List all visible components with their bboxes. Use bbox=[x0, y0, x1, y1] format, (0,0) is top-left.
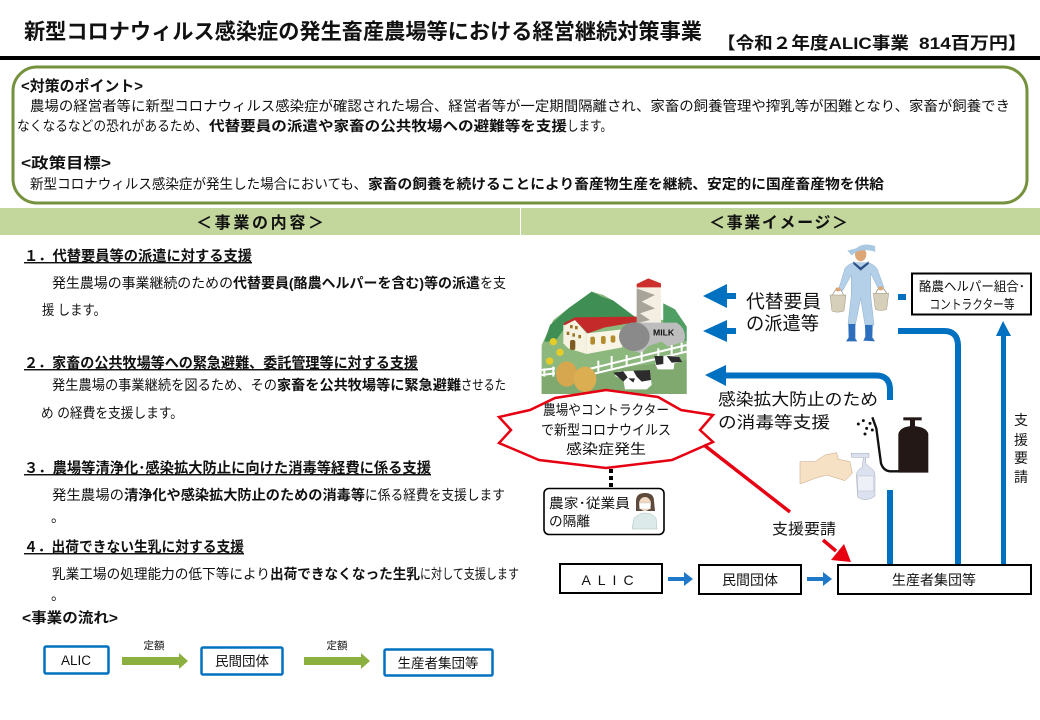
text block: item 2: 家畜を公共牧場等に緊急避難 bbox=[277, 377, 461, 393]
flow box: private organization: 民間団体 bbox=[215, 654, 269, 669]
panel: policy points: 農場の経営者等に新型コロナウィルス感染症が確認された場合、経営者等が一定期間隔離され、家畜の飼養管理や搾乳等が困難となり、家畜が飼養でき bbox=[30, 98, 1010, 114]
label: vertical support request: 請 bbox=[1014, 469, 1028, 485]
icon: farm illustration bbox=[542, 278, 687, 394]
flow chart bbox=[44, 639, 492, 676]
text block: item 4 bbox=[24, 538, 519, 603]
text block: item 4: 出荷できなくなった生乳 bbox=[270, 566, 420, 582]
icon: dairy farmer bbox=[830, 244, 889, 341]
text block: item 1: １．代替要員等の派遣に対する支援 bbox=[24, 247, 252, 265]
text block: item 1: 発生農場の事業継続のための bbox=[52, 275, 233, 291]
callout: outbreak burst bbox=[499, 390, 713, 468]
box: producer groups bbox=[838, 565, 1031, 594]
flow arrow: fixed amount 2 bbox=[304, 639, 370, 669]
text block: item 2: ２．家畜の公共牧場等への緊急避難、委託管理等に対する支援 bbox=[24, 354, 418, 372]
dotted connector bbox=[609, 469, 613, 488]
heading: business image: ＜事業イメージ＞ bbox=[709, 213, 848, 232]
box: private organization: 民間団体 bbox=[722, 572, 778, 588]
label: disinfection support bbox=[718, 390, 878, 432]
budget label: 814百万円】 bbox=[919, 34, 1027, 53]
icon: sprayer bbox=[857, 417, 928, 473]
label: dispatch of replacement staff: 代替要員 bbox=[746, 291, 821, 312]
panel: policy points: します。 bbox=[567, 118, 612, 134]
heading: business content: ＜事業の内容＞ bbox=[196, 213, 324, 232]
panel: policy points: 新型コロナウィルス感染症が発生した場合においても、 bbox=[30, 176, 367, 192]
arrow: ALIC to organization bbox=[668, 572, 693, 586]
panel: policy points bbox=[13, 67, 1027, 203]
arrow: line from producer groups to helper bbox=[898, 331, 958, 565]
panel: policy points: 代替要員の派遣や家畜の公共牧場への避難等を支援 bbox=[209, 118, 567, 134]
flow box: ALIC bbox=[44, 646, 108, 674]
flow box: producer groups bbox=[384, 650, 492, 676]
text block: item 1 bbox=[24, 247, 506, 318]
icon: masked person bbox=[632, 493, 657, 529]
label: disinfection support: の消毒等支援 bbox=[718, 413, 830, 432]
text block: item 2 bbox=[24, 354, 506, 421]
panel: policy points: <対策のポイント> bbox=[21, 77, 143, 95]
text block: item 2: 発生農場の事業継続を図るため、その bbox=[52, 377, 277, 393]
text block: item 4: 。 bbox=[51, 587, 65, 603]
text block: item 3: 清浄化や感染拡大防止のための消毒等 bbox=[124, 487, 365, 503]
text block: item 4: 乳業工場の処理能力の低下等により bbox=[52, 566, 270, 582]
arrow: line to farm via disinfection bbox=[705, 365, 890, 565]
label: vertical support request: 支 bbox=[1014, 412, 1028, 428]
label: vertical support request: 援 bbox=[1014, 432, 1028, 448]
arrow: replacement staff 1 bbox=[703, 284, 736, 308]
flow arrow: fixed amount 1 bbox=[122, 639, 188, 669]
text block: item 1: を支 bbox=[480, 275, 506, 291]
flow arrow: fixed amount 1: 定額 bbox=[144, 639, 165, 652]
callout: isolation: 農家･従業員 bbox=[549, 496, 630, 511]
budget label bbox=[717, 33, 1027, 53]
arrow: replacement staff 2 bbox=[703, 320, 736, 342]
box: ALIC: ALIC bbox=[581, 572, 641, 588]
flow box: producer groups: 生産者集団等 bbox=[398, 655, 478, 671]
label: vertical support request bbox=[1014, 412, 1028, 485]
callout: outbreak burst: で新型コロナウイルス bbox=[541, 422, 671, 438]
label: disinfection support: 感染拡大防止のため bbox=[718, 390, 878, 409]
label: vertical support request: 要 bbox=[1014, 450, 1028, 466]
text block: item 4: ４．出荷できない生乳に対する支援 bbox=[24, 538, 244, 556]
panel: policy points: なくなるなどの恐れがあるため、 bbox=[17, 118, 208, 134]
text block: item 2: させるた bbox=[461, 377, 506, 393]
box: ALIC bbox=[560, 564, 662, 593]
box: producer groups: 生産者集団等 bbox=[892, 572, 976, 588]
callout: outbreak burst: 農場やコントラクター bbox=[543, 402, 669, 418]
arrow: support request upward bbox=[996, 321, 1011, 565]
text block: item 1: 援 します。 bbox=[42, 302, 106, 318]
icon: farm illustration: MILK bbox=[653, 327, 675, 337]
label: dispatch of replacement staff bbox=[746, 291, 821, 334]
panel: policy points: 家畜の飼養を続けることにより畜産物生産を継続、安定的に国産畜産物を供給 bbox=[368, 176, 884, 192]
text block: item 3 bbox=[24, 459, 505, 525]
text block: item 1: 代替要員(酪農ヘルパーを含む)等の派遣 bbox=[233, 275, 480, 291]
icon: hand sanitizer bbox=[800, 453, 875, 500]
text block: item 3: 発生農場の bbox=[52, 487, 124, 503]
connector dash bbox=[898, 294, 906, 300]
title rule bbox=[0, 56, 1040, 60]
text block: item 3: 。 bbox=[51, 509, 65, 525]
flow box: ALIC: ALIC bbox=[61, 653, 91, 668]
text block: item 2: め の経費を支援します。 bbox=[41, 405, 183, 421]
label: support request: 支援要請 bbox=[772, 521, 836, 538]
flow arrow: fixed amount 2: 定額 bbox=[326, 639, 348, 652]
box: dairy helper union: 酪農ヘルパー組合･ bbox=[919, 279, 1025, 294]
arrow: organization to producers bbox=[807, 572, 832, 586]
text block: item 3: に係る経費を支援します bbox=[365, 487, 505, 503]
heading: business image bbox=[521, 208, 1040, 235]
heading: business flow: <事業の流れ> bbox=[22, 609, 118, 627]
label: dispatch of replacement staff: の派遣等 bbox=[746, 313, 819, 334]
text block: item 4: に対して支援します bbox=[420, 566, 519, 582]
title: 新型コロナウィルス感染症の発生畜産農場等における経営継続対策事業 bbox=[24, 19, 702, 44]
budget label: 【令和２年度ALIC事業 bbox=[717, 33, 909, 53]
callout: outbreak burst: 感染症発生 bbox=[566, 441, 646, 457]
heading: business content bbox=[0, 208, 520, 235]
panel: policy points: <政策目標> bbox=[21, 154, 111, 172]
text block: item 3: ３．農場等清浄化･感染拡大防止に向けた消毒等経費に係る支援 bbox=[24, 459, 431, 477]
callout: isolation bbox=[544, 488, 664, 534]
flow box: private organization bbox=[202, 648, 282, 674]
box: private organization bbox=[699, 565, 801, 594]
box: dairy helper union: コントラクター等 bbox=[930, 297, 1014, 312]
box: dairy helper union bbox=[912, 274, 1031, 314]
callout: isolation: の隔離 bbox=[549, 514, 590, 529]
arrow: support request red bbox=[704, 445, 851, 562]
